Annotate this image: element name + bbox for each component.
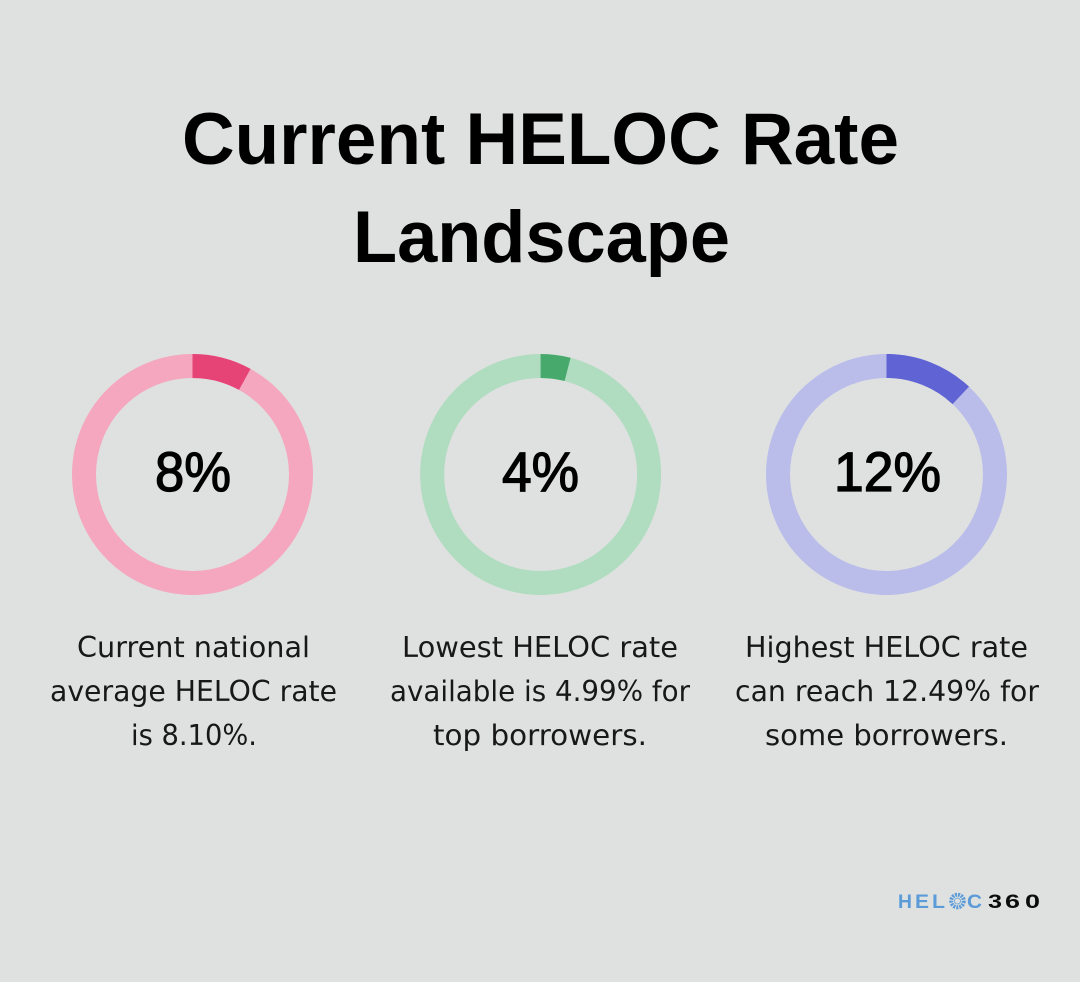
- logo: HELOC360: C: [967, 891, 982, 913]
- title: [182, 99, 899, 278]
- panel: national average rate: [50, 366, 337, 752]
- description: lowest rate: top borrowers.: [433, 718, 647, 752]
- logo: HELOC360: 6: [1005, 891, 1020, 913]
- panel: lowest rate: [390, 366, 690, 752]
- title: Current HELOC Rate: [182, 99, 899, 180]
- donut chart: 12%: [778, 366, 995, 583]
- description: lowest rate: Lowest HELOC rate: [402, 630, 678, 664]
- description: highest rate: some borrowers.: [765, 718, 1008, 752]
- logo: HELOC360: [898, 891, 1040, 913]
- icon: spiral O: [951, 895, 964, 907]
- description: national average: Current national: [77, 630, 310, 664]
- logo: HELOC360: E: [915, 891, 929, 913]
- description: national average: average HELOC rate: [50, 674, 337, 708]
- donut chart: 4%: [432, 366, 649, 583]
- description: highest rate: [735, 630, 1039, 752]
- donut chart: 8%: [84, 366, 301, 583]
- value: 4%: 4%: [502, 440, 579, 503]
- title: Landscape: [353, 197, 730, 278]
- logo: HELOC360: 0: [1025, 891, 1040, 913]
- description: highest rate: Highest HELOC rate: [745, 630, 1028, 664]
- description: national average: [50, 630, 337, 752]
- value: 8%: 8%: [155, 440, 231, 503]
- description: highest rate: can reach 12.49% for: [735, 674, 1039, 708]
- logo: HELOC360: 3: [988, 891, 1002, 913]
- logo: HELOC360: H: [898, 891, 912, 913]
- description: national average: is 8.10%.: [131, 718, 257, 752]
- value: 12%: 12%: [834, 440, 941, 503]
- description: lowest rate: available is 4.99% for: [390, 674, 690, 708]
- description: lowest rate: [390, 630, 690, 752]
- panel: highest rate: [735, 366, 1039, 752]
- logo: HELOC360: L: [932, 891, 945, 913]
